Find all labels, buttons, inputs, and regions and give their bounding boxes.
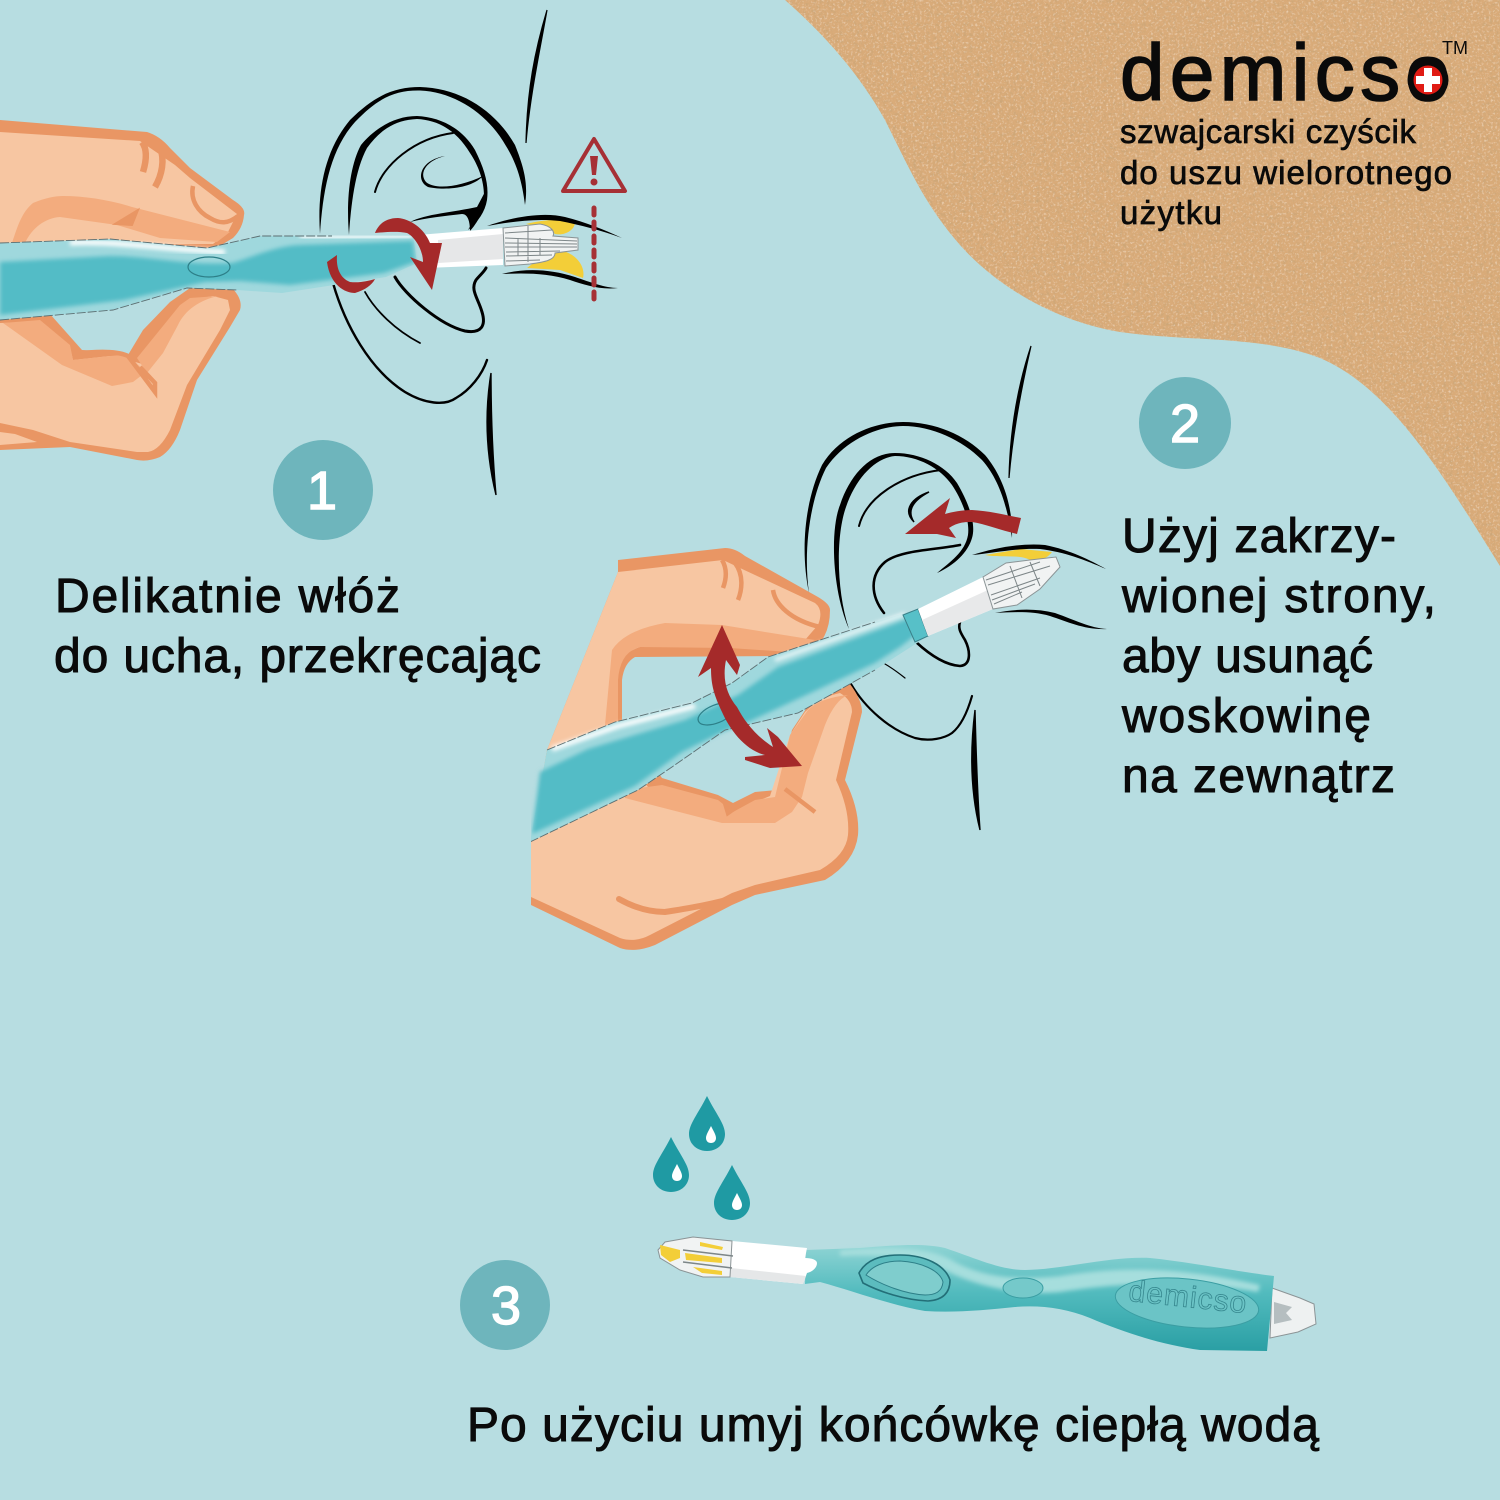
upper finger — [0, 120, 244, 250]
step badge 1 — [273, 440, 373, 540]
product pen — [658, 1237, 1316, 1351]
step 1 text — [54, 570, 541, 683]
pen 2 — [530, 609, 928, 842]
left brush with wax — [658, 1237, 733, 1277]
swiss cross badge — [1408, 60, 1448, 100]
step 1 text: Delikatnie włóż — [55, 570, 400, 623]
hand silhouette — [531, 548, 862, 950]
step 3 text: Po użyciu umyj końcówkę ciepłą wodą — [467, 1399, 1319, 1452]
warning icon — [563, 139, 625, 191]
logo wordmark: demicso — [1120, 28, 1450, 117]
step badge 2 — [1139, 377, 1231, 469]
right cap — [1270, 1288, 1316, 1338]
pen body — [0, 235, 417, 320]
step 2 text: aby usunąć — [1122, 630, 1373, 683]
dashed line — [592, 208, 596, 300]
hand 1 — [0, 120, 244, 461]
hand 2 — [531, 548, 862, 950]
step 2 text: woskowinę — [1121, 690, 1371, 743]
tagline: szwajcarski czyścik — [1120, 113, 1416, 150]
step 2 text: Użyj zakrzy- — [1122, 510, 1396, 563]
water drops — [653, 1096, 750, 1220]
double arrow rotation — [698, 625, 802, 768]
logo — [1120, 28, 1468, 117]
thumb shadow — [625, 695, 848, 823]
logo oval — [1113, 1272, 1261, 1334]
lower thumb — [0, 288, 241, 461]
step badge 1: 1 — [307, 461, 337, 521]
step 2 text: na zewnątrz — [1122, 750, 1395, 803]
round button — [1003, 1278, 1043, 1298]
white collar — [730, 1241, 817, 1284]
drop 3 — [714, 1165, 750, 1220]
step badge 2: 2 — [1170, 394, 1200, 454]
pen body — [530, 609, 928, 842]
ear canal 1 with wax — [487, 215, 622, 288]
step 2 text — [1121, 510, 1436, 803]
hand light skin — [531, 560, 852, 940]
ear canal 2 with wax — [972, 545, 1107, 629]
step badge 3 — [460, 1260, 550, 1350]
pen button — [188, 257, 230, 277]
upper rotation arrow — [375, 218, 442, 290]
white tip — [418, 228, 503, 268]
lower rotation arrow — [327, 255, 375, 293]
hand creases — [722, 560, 820, 813]
pen 1 — [0, 218, 578, 320]
tagline: do uszu wielorotnego — [1120, 154, 1452, 191]
drop 1 — [689, 1096, 725, 1151]
step 1 text: do ucha, przekręcając — [54, 630, 541, 683]
curved arrow into ear — [905, 498, 1021, 538]
trademark: TM — [1442, 38, 1468, 58]
white tip 2 — [918, 557, 1060, 636]
tagline: użytku — [1120, 194, 1222, 231]
handle — [805, 1245, 1274, 1351]
ear 2 — [805, 346, 1031, 830]
drop 2 — [653, 1137, 689, 1192]
step 2 text: wionej strony, — [1121, 570, 1436, 623]
ear 1 — [319, 10, 547, 495]
brush tip — [503, 224, 578, 266]
embossed logo: demicso — [1127, 1275, 1248, 1320]
thumb recess — [859, 1255, 950, 1301]
finger shadow — [605, 623, 815, 725]
palm crease — [619, 895, 745, 912]
tagline — [1120, 113, 1452, 231]
kraft paper corner — [785, 0, 1500, 566]
step badge 3: 3 — [491, 1276, 521, 1336]
